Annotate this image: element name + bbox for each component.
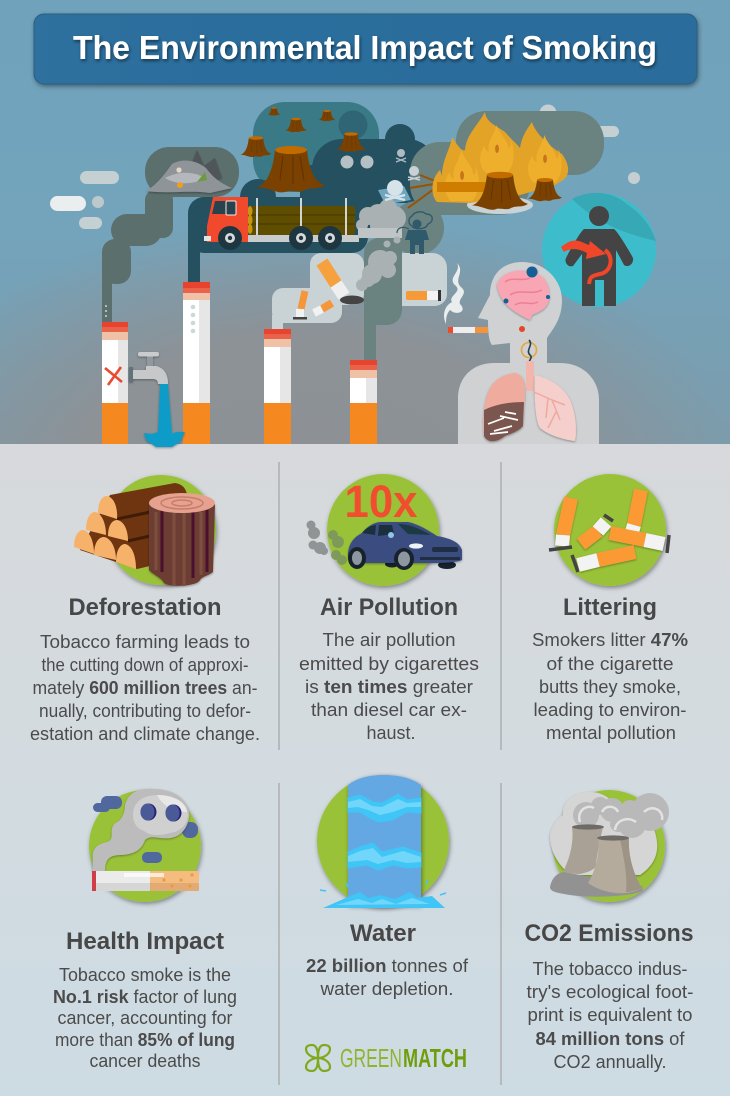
text block: Tobacco smoke is the: [59, 965, 231, 985]
icon: person breathing smoke: [397, 212, 432, 254]
cigarette chimney 2: [183, 282, 210, 444]
panel: deforestation: [30, 475, 260, 744]
text block: haust.: [366, 723, 416, 743]
icon: clover: [306, 1045, 330, 1071]
panel: health impact: [53, 789, 237, 1071]
logo: GreenMatch: [306, 1043, 467, 1073]
icon: exhaust smoke puffs: [356, 199, 406, 291]
text block: [53, 965, 237, 1071]
icon: car with 10x: 10x: [344, 476, 418, 527]
light sky patch under skull: [378, 186, 411, 203]
text block: cancer, accounting for: [58, 1008, 233, 1028]
divider: [500, 783, 502, 1085]
icon: skull smoke cigarette: [89, 789, 201, 902]
icon: cigarette at mouth: [448, 327, 488, 333]
text block: No.1 risk factor of lung: [53, 987, 237, 1007]
text block: water depletion.: [319, 979, 454, 999]
smoke cloud: light littering stream: [272, 253, 447, 331]
text block: mental pollution: [546, 723, 676, 743]
icon: damaged lung: [483, 373, 525, 441]
text block: CO2 annually.: [554, 1052, 666, 1072]
text block: butts they smoke,: [539, 677, 681, 697]
text block: Tobacco farming leads to: [40, 632, 250, 652]
heading: Littering: [563, 594, 657, 621]
text block: the cutting down of approxi-: [42, 655, 248, 675]
heading: CO2 Emissions: [524, 920, 694, 947]
icon: person with stomach pain in teal circle: [542, 193, 656, 307]
text block: print is equivalent to: [528, 1005, 692, 1025]
icon: cigarette butts: [549, 474, 669, 586]
text block: [299, 630, 479, 743]
text block: emitted by cigarettes: [299, 654, 479, 674]
cigarette chimney 4: [350, 360, 377, 444]
logo: GreenMatch: GREEN: [340, 1043, 402, 1073]
panel: water: [306, 775, 469, 999]
text block: 84 million tons of: [536, 1029, 686, 1049]
text block: nually, contributing to defor-: [39, 701, 251, 721]
text block: Smokers litter 47%: [532, 630, 688, 650]
cigarette chimney 3: [264, 329, 291, 444]
icon: healthy lung: [534, 375, 576, 441]
icon: windpipe: [526, 361, 534, 391]
text block: [526, 959, 694, 1072]
decorative clouds and dots: [50, 104, 640, 229]
icon: trash heap: [146, 150, 232, 193]
heading: Health Impact: [66, 928, 224, 955]
logo: GreenMatch: MATCH: [403, 1043, 467, 1073]
icon: cigarette smoke wisp: [444, 263, 464, 324]
cigarette chimney 1: [102, 305, 128, 444]
icon: littered butts in smoke cloud: [293, 262, 441, 320]
text block: mately 600 million trees an-: [32, 678, 258, 698]
smoke cloud: teal deforestation cloud: [253, 102, 379, 192]
icon: brain: [497, 266, 550, 320]
icon: waterfall: [317, 775, 449, 908]
text block: [532, 630, 688, 743]
divider: [278, 783, 280, 1085]
text block: is ten times greater: [305, 677, 473, 697]
smoke cloud: grey-green burning forest stream: [364, 111, 604, 362]
text block: estation and climate change.: [30, 724, 260, 744]
icon: logging truck: [204, 197, 359, 250]
title banner: [34, 14, 697, 84]
title banner: The Environmental Impact of Smoking: [73, 29, 657, 66]
text block: 22 billion tonnes of: [306, 956, 469, 976]
heading: Water: [350, 920, 416, 947]
panel: illustrated sky background: [0, 0, 730, 444]
text block: The air pollution: [322, 630, 456, 650]
text block: of the cigarette: [546, 654, 674, 674]
icon: car with 10x: [306, 474, 462, 586]
icon: cooling towers: [550, 790, 669, 902]
text block: The tobacco indus-: [532, 959, 688, 979]
icon: tree stumps in smoke cloud: [241, 107, 365, 192]
panel: CO2 emissions: [524, 790, 694, 1072]
icon: small skulls: [385, 149, 420, 200]
panel: air pollution: [299, 474, 479, 743]
icon: smoker silhouette with organs: [458, 262, 599, 444]
text block: [30, 632, 260, 744]
text block: more than 85% of lung: [55, 1030, 235, 1050]
icon: stacked logs: [74, 475, 216, 586]
heading: Deforestation: [68, 594, 222, 621]
icon: water tap: [129, 352, 185, 447]
text block: [306, 956, 469, 999]
text block: try's ecological foot-: [526, 982, 694, 1002]
divider: [278, 462, 280, 750]
panel: lower content background: [0, 444, 730, 1096]
panel: littering: [532, 474, 688, 743]
heading: Air Pollution: [320, 594, 458, 621]
smoke cloud: dark teal truck stream: [188, 124, 437, 287]
icon: DNA throat ring: [522, 340, 536, 365]
text block: leading to environ-: [534, 700, 686, 720]
smoke column: grey-green trash stream: [102, 147, 239, 325]
text block: than diesel car ex-: [311, 700, 467, 720]
icon: burning forest: [408, 112, 568, 214]
divider: [500, 462, 502, 750]
text block: cancer deaths: [90, 1051, 200, 1071]
